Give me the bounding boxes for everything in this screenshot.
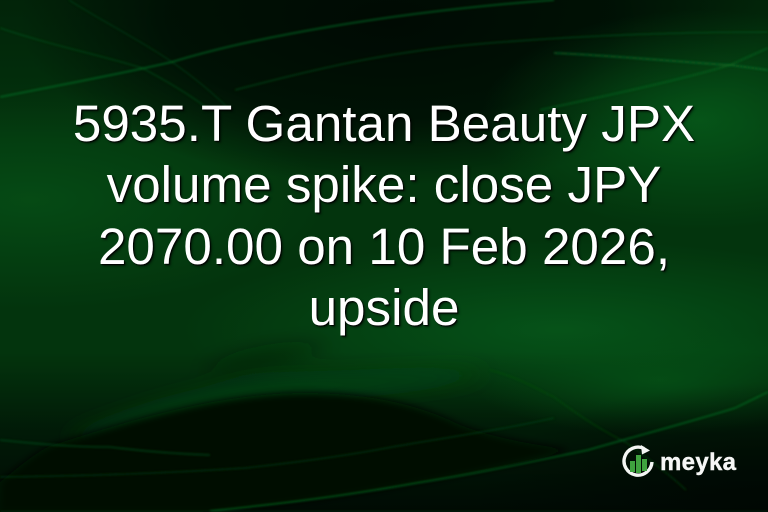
title — [73, 95, 696, 338]
logo: meyka — [622, 445, 737, 477]
title: volume spike: close JPY — [107, 156, 661, 213]
wordmark: meyka — [660, 449, 737, 476]
dark hill — [0, 393, 570, 512]
icon: ring with green bars — [624, 445, 652, 475]
title: 5935.T Gantan Beauty JPX — [73, 95, 695, 152]
title: upside — [309, 279, 459, 336]
title: 2070.00 on 10 Feb 2026, — [98, 218, 670, 275]
